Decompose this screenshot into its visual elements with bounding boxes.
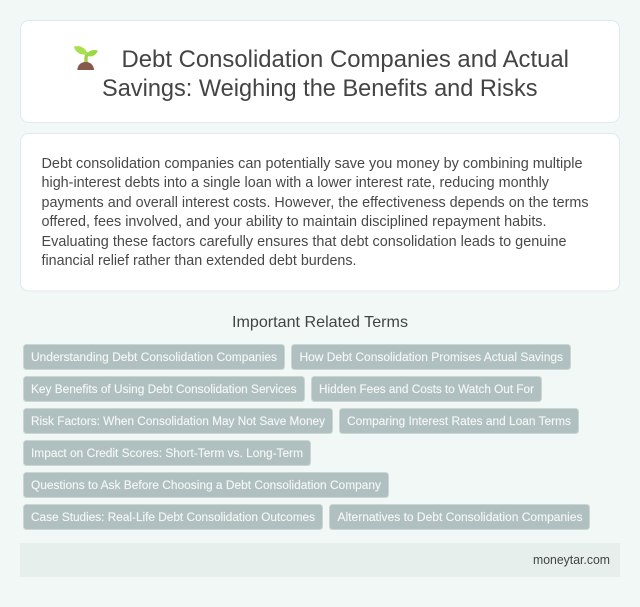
footer xyxy=(20,543,620,577)
text block: summary: payments and overall interest costs. However, the effectiveness depends on the terms xyxy=(42,195,588,211)
text block: summary: Debt consolidation companies can potentially save you money by combining multiple xyxy=(42,156,582,172)
tag: actual savings xyxy=(292,344,570,370)
tag: questions: Questions to Ask Before Choosing a Debt Consolidation Company xyxy=(31,478,382,492)
tag: risk factors xyxy=(24,408,332,434)
tag: key benefits xyxy=(24,376,304,402)
heading: related terms: Important Related Terms xyxy=(232,314,408,331)
tag: questions xyxy=(24,472,388,498)
text block: summary: Evaluating these factors carefully ensures that debt consolidation leads to genuine xyxy=(42,234,566,250)
tag: credit scores: Impact on Credit Scores: Short-Term vs. Long-Term xyxy=(31,446,303,460)
tag: understanding: Understanding Debt Consolidation Companies xyxy=(31,350,277,364)
tag: credit scores xyxy=(24,440,310,466)
text block: summary: financial relief rather than extended debt burdens. xyxy=(42,253,356,269)
tag: actual savings: How Debt Consolidation Promises Actual Savings xyxy=(300,350,563,364)
footer text: site name: moneytar.com xyxy=(533,553,610,567)
tag: case studies: Case Studies: Real-Life Debt Consolidation Outcomes xyxy=(31,510,315,524)
title: Savings: Weighing the Benefits and Risks xyxy=(102,75,538,102)
tag: alternatives xyxy=(330,504,590,530)
tag: key benefits: Key Benefits of Using Debt Consolidation Services xyxy=(31,382,296,396)
tag: hidden fees: Hidden Fees and Costs to Watch Out For xyxy=(319,382,534,396)
text block: summary: offered, fees involved, and your ability to maintain disciplined repayment habits. xyxy=(42,214,546,230)
title xyxy=(102,46,569,102)
panel: title card xyxy=(20,20,620,122)
panel: summary paragraph xyxy=(20,134,620,291)
title: Debt Consolidation Companies and Actual xyxy=(122,46,569,73)
tag: understanding xyxy=(24,344,284,370)
tag: hidden fees xyxy=(312,376,542,402)
panel: related term tags xyxy=(24,344,590,530)
text block: summary: high-interest debts into a single loan with a lower interest rate, reducing monthly xyxy=(42,175,550,191)
text block: summary xyxy=(42,156,588,269)
tag: alternatives: Alternatives to Debt Consolidation Companies xyxy=(338,510,582,524)
tag: comparing rates xyxy=(340,408,578,434)
tag: risk factors: Risk Factors: When Consolidation May Not Save Money xyxy=(31,414,326,428)
tag: comparing rates: Comparing Interest Rates and Loan Terms xyxy=(347,414,571,428)
icon: seedling xyxy=(74,46,98,70)
tag: case studies xyxy=(24,504,322,530)
